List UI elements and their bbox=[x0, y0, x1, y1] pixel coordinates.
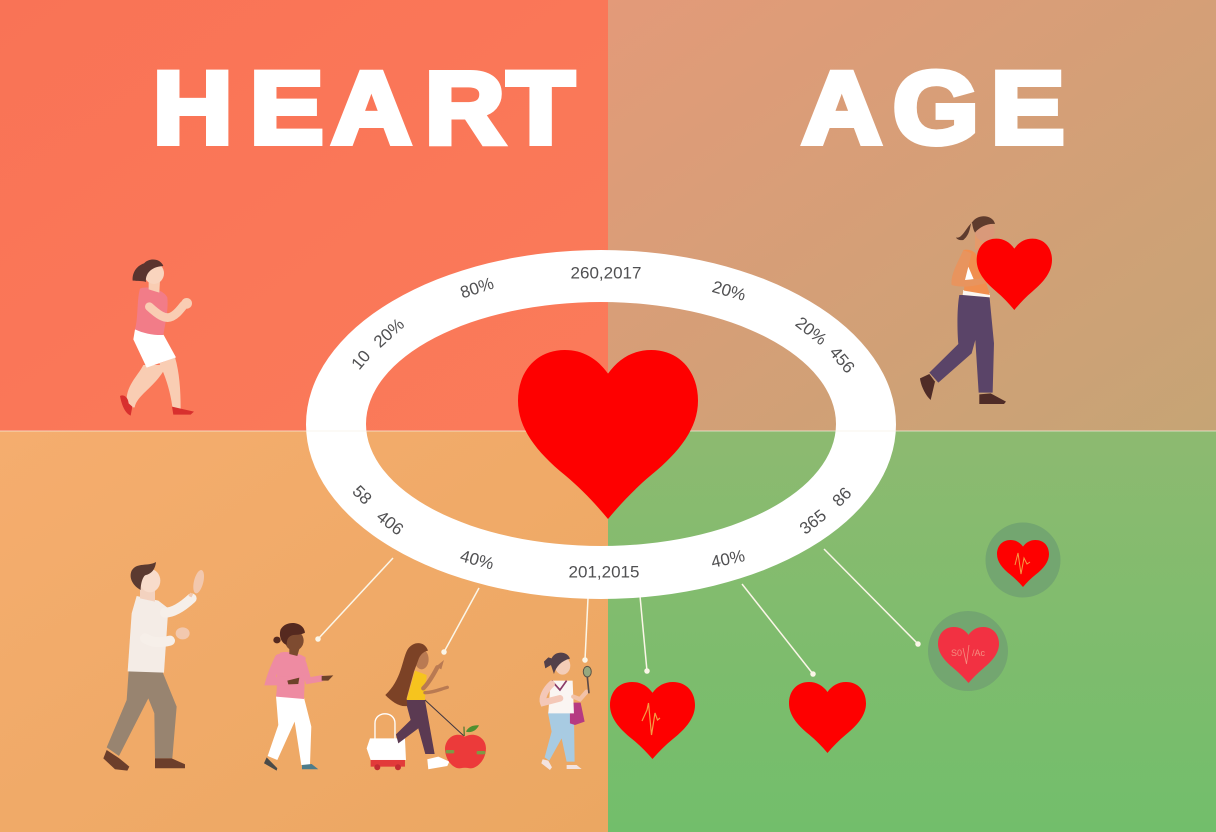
ring labels: 40% bbox=[458, 546, 496, 574]
panel: top-left red quadrant bbox=[0, 0, 608, 431]
panel: bottom-left orange quadrant bbox=[0, 431, 608, 832]
panel: bottom-right green quadrant bbox=[608, 431, 1216, 832]
panel: top-right tan quadrant bbox=[608, 0, 1216, 431]
central heart bbox=[518, 350, 698, 519]
horizontal divider bbox=[0, 430, 1216, 432]
title: HEART: HEART bbox=[153, 52, 574, 165]
group: figures on the orange panel bbox=[103, 562, 591, 771]
icon: heart held by woman bbox=[977, 239, 1052, 310]
ring labels: 10 bbox=[348, 347, 374, 373]
ring labels: 80% bbox=[458, 274, 496, 302]
icon: heart badge with pulse bbox=[986, 522, 1060, 598]
icon: heart badge with handwriting: /Ac bbox=[972, 648, 986, 658]
ring labels bbox=[348, 264, 858, 582]
ring labels: 86 bbox=[829, 484, 855, 510]
ring labels: 20% bbox=[710, 277, 748, 305]
ring labels: 406 bbox=[373, 507, 407, 539]
ring labels: 201,2015 bbox=[569, 562, 639, 582]
icon: apple bbox=[445, 725, 486, 768]
ring labels: 58 bbox=[349, 482, 375, 508]
ring labels: 456 bbox=[826, 343, 858, 377]
icon: heart badge with handwriting bbox=[928, 611, 1008, 691]
ring labels: 20% bbox=[792, 313, 830, 349]
icon: white and red cart bbox=[367, 714, 406, 770]
icon: heart with ECG line bbox=[610, 682, 695, 759]
figure: girl in pink sweater bbox=[264, 623, 333, 771]
figure: woman carrying a large heart bbox=[920, 216, 1052, 404]
title: AGE: AGE bbox=[802, 52, 1064, 165]
figure: man in white shirt bbox=[103, 562, 206, 771]
ring labels: 40% bbox=[709, 546, 747, 572]
ring labels: 20% bbox=[370, 315, 408, 351]
central ring bbox=[306, 250, 896, 599]
arrows from ring to figures bbox=[316, 549, 920, 676]
ring labels: 260,2017 bbox=[571, 264, 641, 282]
figure: small girl with racket bbox=[541, 653, 591, 770]
icon: plain heart bbox=[789, 682, 866, 753]
ring labels: 365 bbox=[796, 506, 830, 538]
figure: girl with long hair bbox=[385, 643, 464, 769]
figure: woman in pink top and white skirt bbox=[120, 259, 194, 416]
icon: heart badge with handwriting: S0 bbox=[951, 648, 962, 658]
